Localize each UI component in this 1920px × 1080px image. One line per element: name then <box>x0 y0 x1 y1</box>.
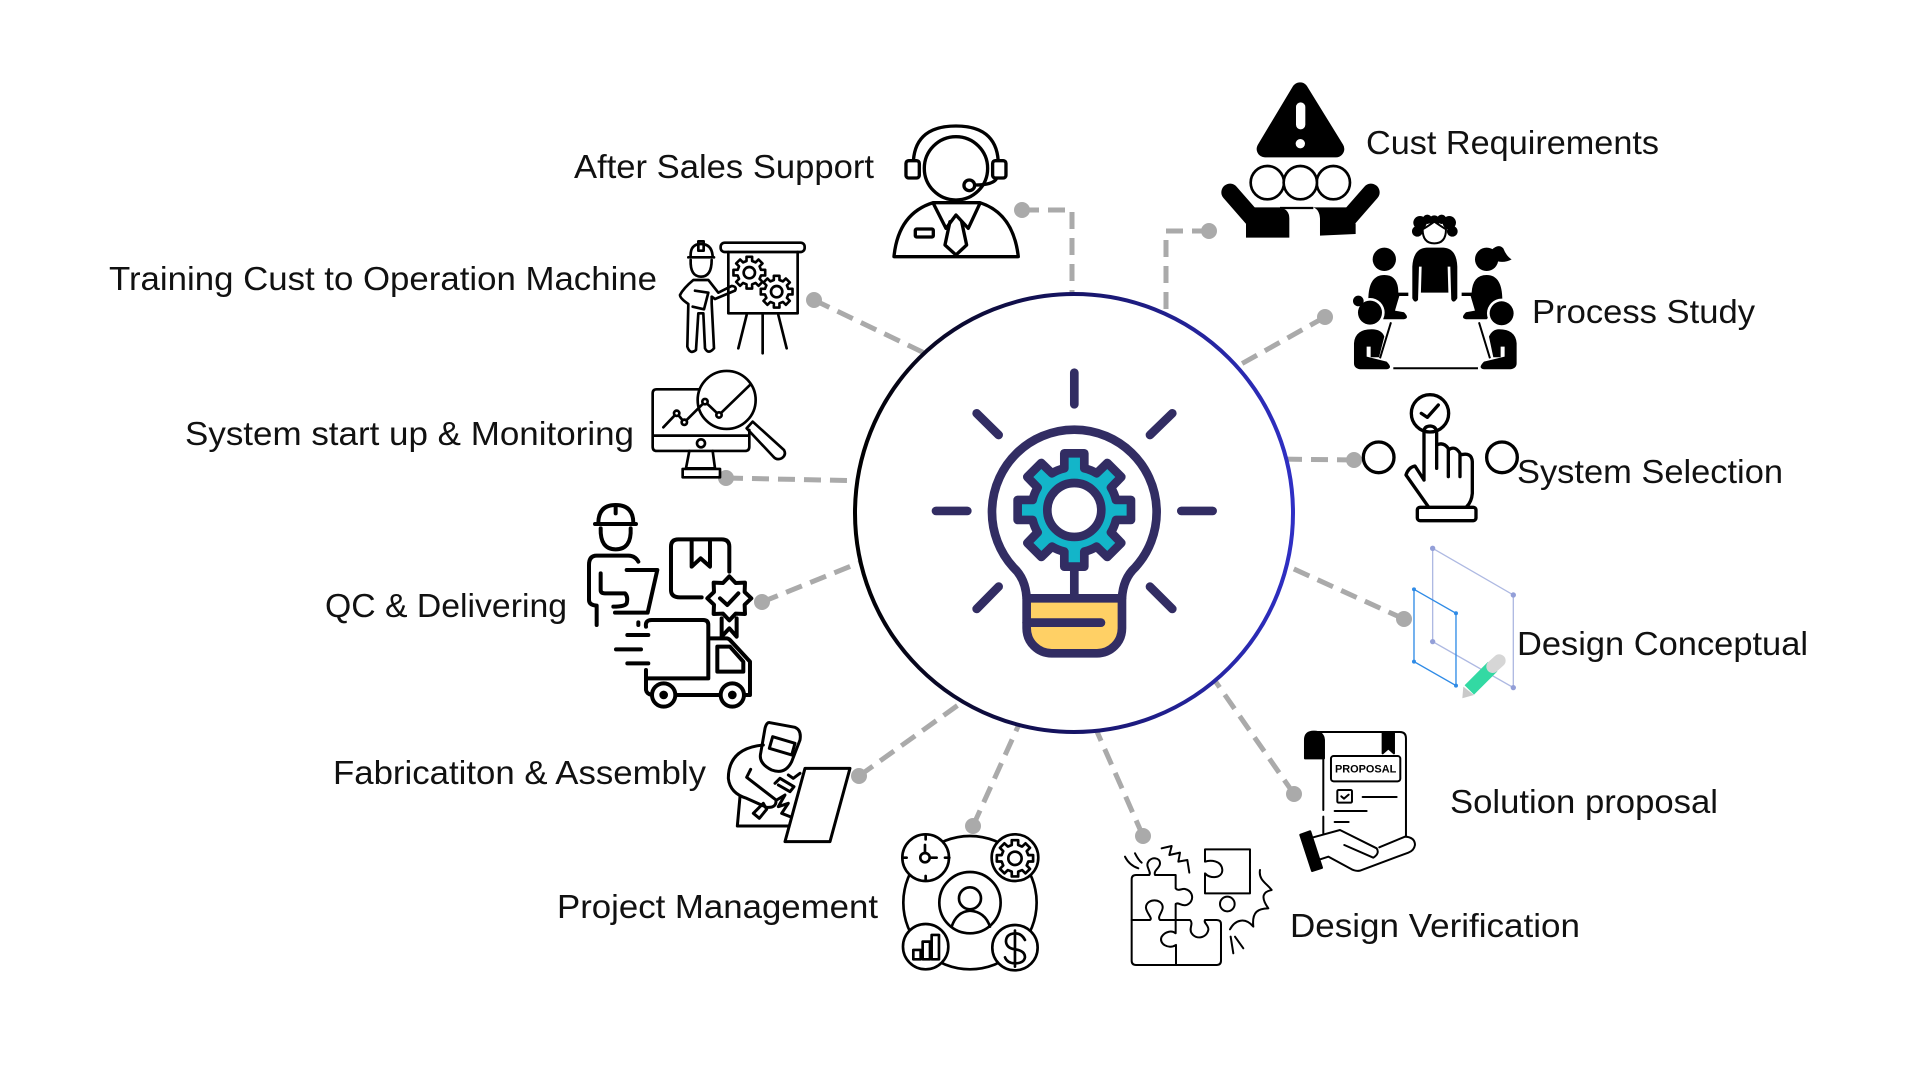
left pair of seated people <box>1353 248 1408 369</box>
right pair of seated people <box>1462 246 1517 369</box>
label: System Selection: System Selection <box>1517 453 1783 490</box>
proposal stamp text: PROPOSAL <box>1335 763 1397 775</box>
icon: design verification puzzle <box>1125 846 1272 965</box>
icon: light bulb with gear <box>936 373 1213 653</box>
label: After Sales Support: After Sales Support <box>574 148 874 185</box>
label: Cust Requirements: Cust Requirements <box>1366 124 1659 161</box>
icon: project management hub <box>902 834 1038 970</box>
label: Project Management: Project Management <box>557 888 878 925</box>
icon: after sales support agent <box>894 126 1018 257</box>
label: System start up & Monitoring: System start up & Monitoring <box>185 415 634 452</box>
central circle <box>855 294 1293 732</box>
label: Training Cust to Operation Machine: Training Cust to Operation Machine <box>109 260 657 297</box>
icon: system monitoring screen <box>653 371 785 477</box>
icon: QC inspector, box, badge and truck <box>589 505 751 707</box>
icon: process study meeting table <box>1353 215 1517 369</box>
connector end dots <box>718 202 1412 844</box>
label: QC & Delivering: QC & Delivering <box>325 587 567 624</box>
label: Process Study: Process Study <box>1532 293 1756 330</box>
icon: training at gear board <box>680 241 805 353</box>
icon: solution proposal document in hand <box>1301 732 1415 871</box>
label: Design Verification: Design Verification <box>1290 907 1580 944</box>
icon: design conceptual wireframe and pencil <box>1412 546 1516 698</box>
icon: system selection hand <box>1363 395 1517 521</box>
icon: welder fabricating <box>728 723 850 842</box>
dashed connectors <box>726 210 1404 836</box>
icon: cust requirements warning and hands <box>1230 91 1371 238</box>
label: Fabricatiton & Assembly: Fabricatiton & Assembly <box>333 754 707 791</box>
label: Design Conceptual: Design Conceptual <box>1517 625 1808 662</box>
label: Solution proposal: Solution proposal <box>1450 783 1718 820</box>
